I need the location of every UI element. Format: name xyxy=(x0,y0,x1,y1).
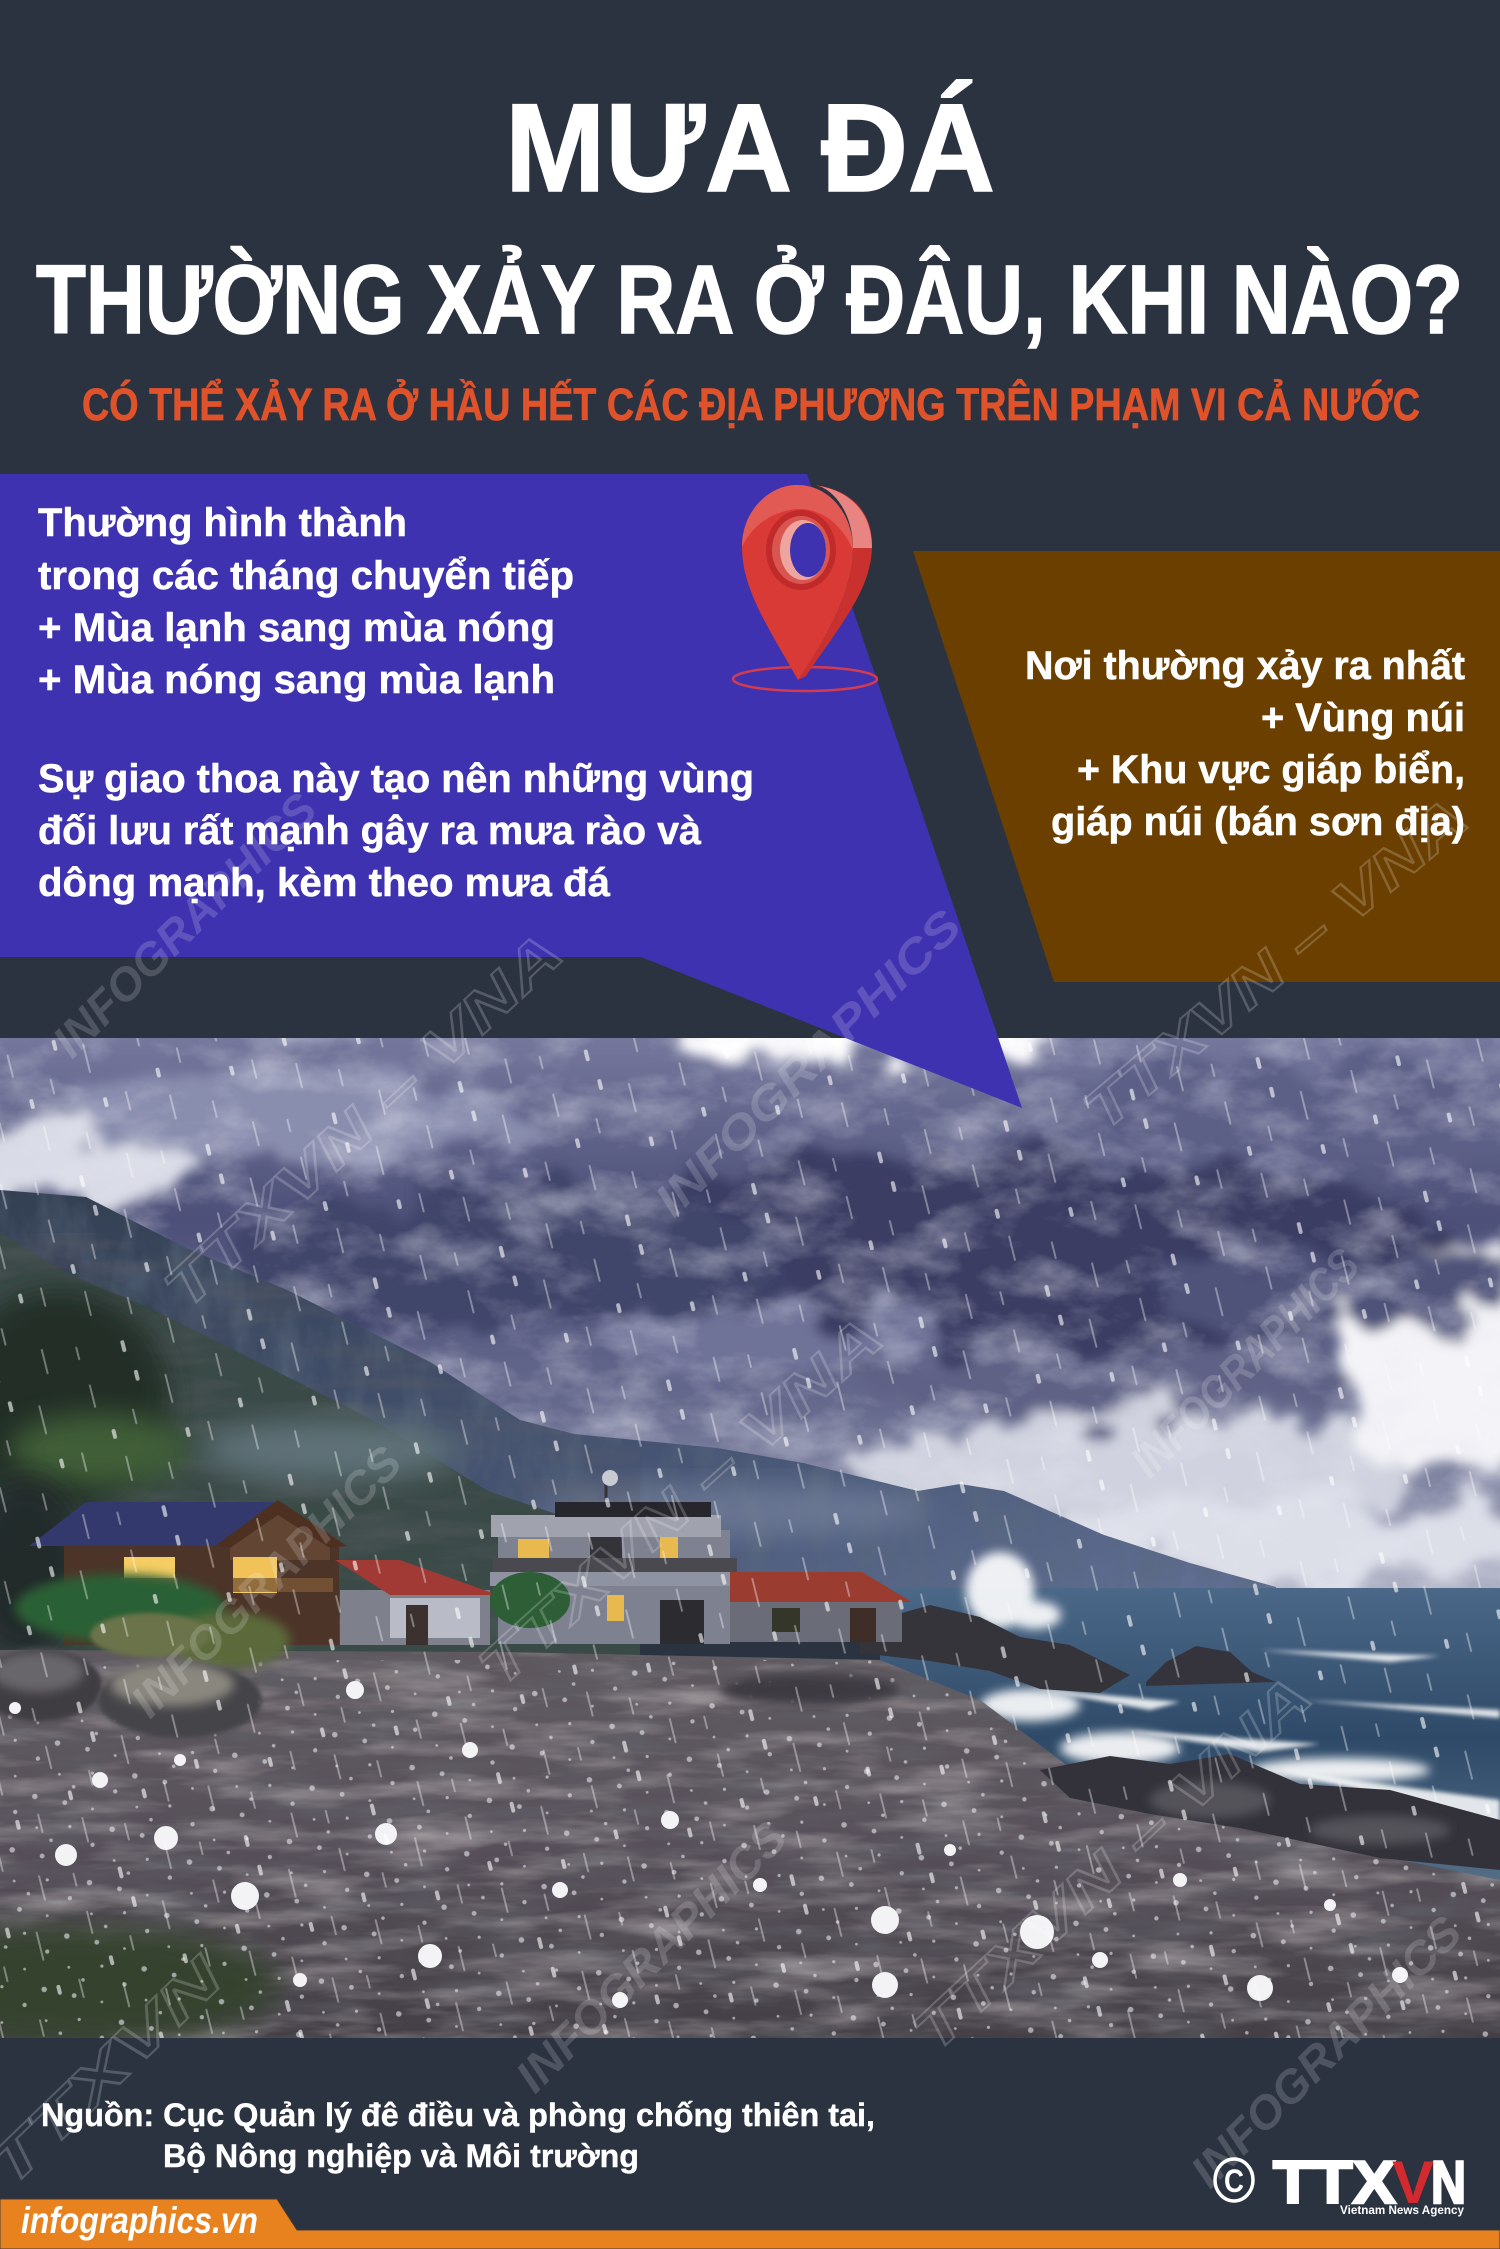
front forested hill xyxy=(0,1233,640,1660)
logo: TTXVN: V xyxy=(1392,2149,1434,2216)
watermarks: INFOGRAPHICS xyxy=(505,1811,797,2102)
watermarks: TTXVN – VNA xyxy=(466,1304,894,1699)
watermarks: INFOGRAPHICS xyxy=(644,899,971,1226)
watermarks: INFOGRAPHICS xyxy=(1120,1238,1369,1487)
small hail dots xyxy=(0,1660,1500,2038)
copyright mark: C xyxy=(1224,2163,1244,2199)
stormy sky xyxy=(0,1038,1500,1588)
shoreline rocks xyxy=(720,1605,1500,1870)
text: forming months: Thường hình thành xyxy=(38,501,407,545)
tree beside house xyxy=(490,1572,570,1628)
title xyxy=(36,79,1463,430)
rain streaks xyxy=(0,1038,1500,2038)
text: locations: Nơi thường xảy ra nhất xyxy=(1025,644,1465,688)
text: convection explanation: đối lưu rất mạnh gây ra mưa rào và xyxy=(38,809,702,853)
panel: when hail forms xyxy=(0,474,1022,1108)
icon: red location pin xyxy=(733,485,877,691)
watermarks: INFOGRAPHICS xyxy=(1180,1906,1472,2197)
source note: Bộ Nông nghiệp và Môi trường xyxy=(163,2138,639,2174)
title line 1: MƯA ĐÁ xyxy=(505,79,995,218)
panel: where hail occurs xyxy=(913,551,1500,982)
watermarks xyxy=(0,783,1479,2199)
logo: TTXVN: TTX xyxy=(1273,2149,1396,2216)
sea xyxy=(880,1588,1500,1888)
wave splash xyxy=(966,1552,1430,1782)
website label: infographics.vn xyxy=(21,2200,258,2241)
text: locations: + Khu vực giáp biển, xyxy=(1077,748,1465,792)
text: convection explanation: Sự giao thoa này tạo nên những vùng xyxy=(38,757,754,801)
text: locations: + Vùng núi xyxy=(1261,696,1465,740)
right red-roofed house xyxy=(730,1572,912,1642)
text: convection explanation xyxy=(38,757,754,905)
source note: Nguồn: Cục Quản lý đê điều và phòng chống thiên tai, xyxy=(41,2097,875,2133)
wooden house xyxy=(29,1500,347,1645)
text: convection explanation: dông mạnh, kèm theo mưa đá xyxy=(38,861,611,905)
text: forming months: trong các tháng chuyển tiếp xyxy=(38,554,574,598)
footer bar xyxy=(0,2199,1500,2249)
watermarks: TTXVN – VNA xyxy=(151,920,574,1321)
text: locations xyxy=(1025,644,1465,844)
logo: TTXVN xyxy=(1215,2149,1466,2217)
watermarks: TTXVN – VNA xyxy=(1071,785,1479,1142)
copyright mark xyxy=(1215,2159,1253,2201)
source note xyxy=(41,2097,875,2174)
logo: TTXVN: Vietnam News Agency xyxy=(1340,2203,1464,2217)
text: forming months xyxy=(38,501,574,702)
text: forming months: + Mùa lạnh sang mùa nóng xyxy=(38,606,555,650)
foreground left boulders and shrubs xyxy=(0,1574,290,1738)
text: locations: giáp núi (bán sơn địa) xyxy=(1051,800,1465,844)
concrete two-storey house xyxy=(490,1470,738,1644)
watermarks: INFOGRAPHICS xyxy=(120,1436,412,1727)
moss at lower left xyxy=(0,1925,280,2045)
text: forming months: + Mùa nóng sang mùa lạnh xyxy=(38,658,555,702)
ground with hail xyxy=(0,1650,1500,2038)
illustration: hailstorm over a coastal village xyxy=(0,1000,1500,2045)
logo: TTXVN: N xyxy=(1431,2149,1466,2216)
brown shape xyxy=(913,551,1500,982)
large hailstones xyxy=(9,1681,1408,2008)
small red-roofed house xyxy=(335,1560,498,1645)
watermarks: TTXVN – VNA xyxy=(900,1663,1323,2064)
blue speech shape xyxy=(0,474,1022,1108)
watermarks: INFOGRAPHICS xyxy=(42,783,327,1067)
back mountain range xyxy=(0,1190,1276,1588)
offshore rock xyxy=(1146,1646,1276,1686)
